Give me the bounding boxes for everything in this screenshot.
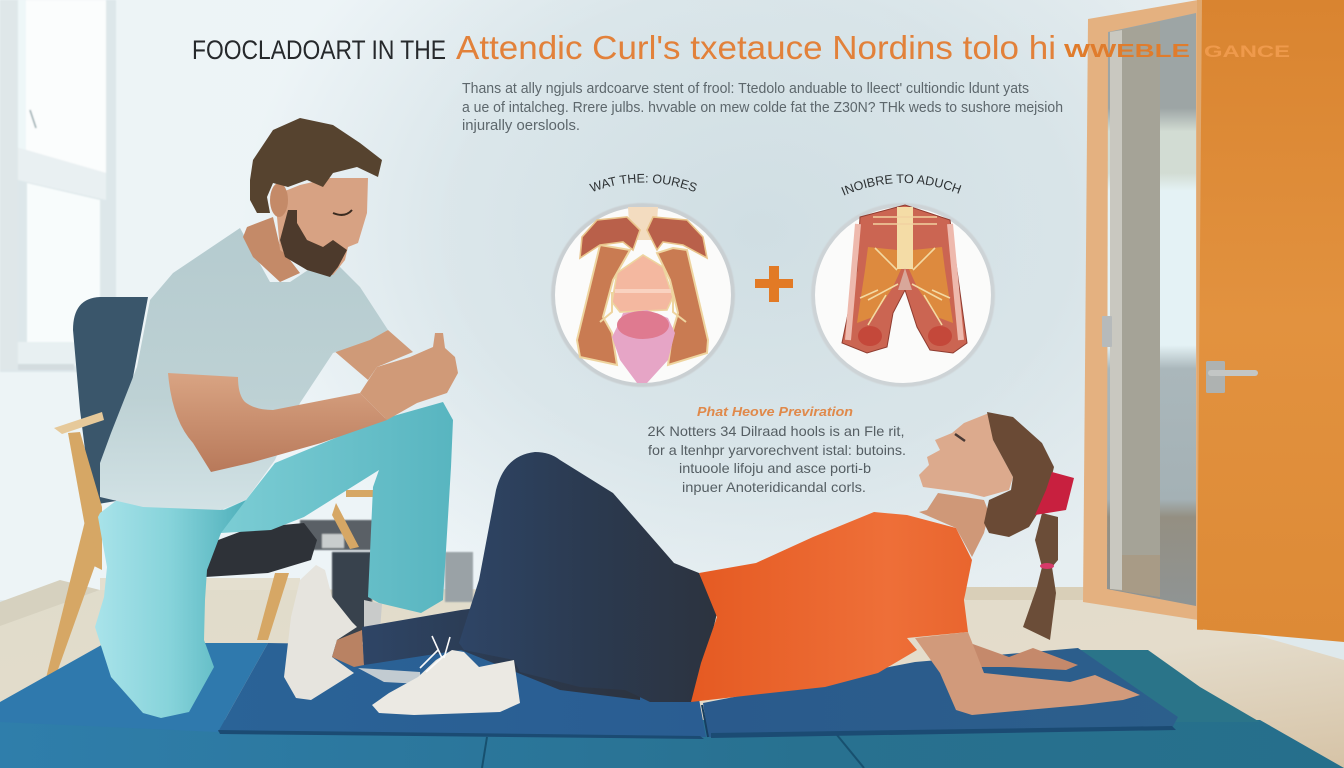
label: left diagram: WAT THE: OURES xyxy=(589,174,697,192)
plus sign xyxy=(755,266,793,302)
man: neck xyxy=(243,217,300,282)
mat: back left xyxy=(0,643,268,732)
chair xyxy=(46,297,373,678)
mat: center xyxy=(218,643,706,737)
prevention block: Phat Heove Previration xyxy=(697,404,853,419)
mats xyxy=(0,643,1344,768)
window xyxy=(0,0,116,372)
title xyxy=(192,29,1290,66)
man: eye and brow xyxy=(333,210,352,215)
right muscle cap xyxy=(647,217,707,258)
woman: face xyxy=(919,413,1013,497)
title: GANCE xyxy=(1204,42,1290,61)
woman: laces xyxy=(420,636,450,672)
man xyxy=(95,118,458,718)
prevention block: for a ltenhpr yarvorechvent istal: butoins. xyxy=(648,442,906,458)
chair back xyxy=(73,297,148,505)
woman: near arm xyxy=(915,632,1140,715)
mat: front row xyxy=(0,720,1344,768)
bladder xyxy=(612,255,673,312)
woman: eye xyxy=(955,434,965,441)
woman: bent leg and hip xyxy=(459,452,717,702)
man: far arm xyxy=(333,330,413,380)
woman: hair xyxy=(984,412,1054,537)
woman: hair tie xyxy=(1035,472,1074,515)
door and frame xyxy=(1083,0,1344,642)
diagram: left anatomy circle xyxy=(551,203,735,387)
door handle xyxy=(1206,361,1258,393)
side nerves xyxy=(600,292,686,322)
man: near arm xyxy=(168,373,387,472)
man: ear xyxy=(270,183,288,217)
man: shoe heel behind xyxy=(364,600,382,640)
woman: white shoe xyxy=(372,650,520,715)
woman xyxy=(332,412,1140,715)
woman: lower leg xyxy=(362,597,640,700)
man: kneeling leg xyxy=(95,497,246,718)
man: front leg xyxy=(200,402,453,613)
man: hands xyxy=(360,333,458,420)
man: shirt xyxy=(100,228,388,510)
woman: shirt xyxy=(691,512,972,702)
prevention block: 2K Notters 34 Dilraad hools is an Fle rit, xyxy=(648,423,904,439)
title: Attendic Curl's txetauce Nordins tolo hi xyxy=(456,29,1056,66)
intro paragraph: injurally oerslools. xyxy=(462,118,580,134)
woman: far arm xyxy=(970,643,1078,670)
chair wood frame xyxy=(46,412,373,678)
woman: ankle xyxy=(332,630,364,667)
woman: braid xyxy=(1023,513,1058,640)
intro paragraph: Thans at ally ngjuls ardcoarve stent of frool: Ttedolo anduable to lleect' cultiondic ldunt yats xyxy=(462,81,1029,97)
title: WWEBLE xyxy=(1064,41,1190,61)
prevention block: inpuer Anoteridicandal corls. xyxy=(682,479,866,495)
prevention block xyxy=(648,404,906,495)
chair seat xyxy=(205,523,317,577)
intro paragraph xyxy=(462,81,1063,134)
left muscle body xyxy=(577,245,630,365)
diagram: right anatomy circle xyxy=(811,203,995,387)
label: right diagram: INOIBRE TO ADUCH xyxy=(841,174,962,196)
floor xyxy=(0,578,1344,768)
intro paragraph: a ue of intalcheg. Rrere julbs. hvvable on mew colde fat the Z30N? THk weds to sushore mejsioh xyxy=(462,100,1063,116)
left muscle cap xyxy=(580,217,640,258)
floor gear behind the man xyxy=(300,520,473,642)
mat: back right xyxy=(1080,650,1260,722)
man: beard xyxy=(280,210,347,277)
man: lower shoe behind xyxy=(358,668,421,684)
man: face xyxy=(275,178,368,275)
lower organ xyxy=(612,310,675,383)
right muscle body xyxy=(657,248,708,365)
man: white shoe on the mat xyxy=(284,565,357,700)
mat: right xyxy=(703,648,1178,737)
prevention block: intuoole lifoju and asce porti-b xyxy=(679,460,871,476)
title: FOOCLADOART IN THE xyxy=(192,35,446,65)
woman: hair band xyxy=(1040,563,1054,569)
man: hair xyxy=(250,118,382,213)
woman: neck xyxy=(919,493,989,557)
